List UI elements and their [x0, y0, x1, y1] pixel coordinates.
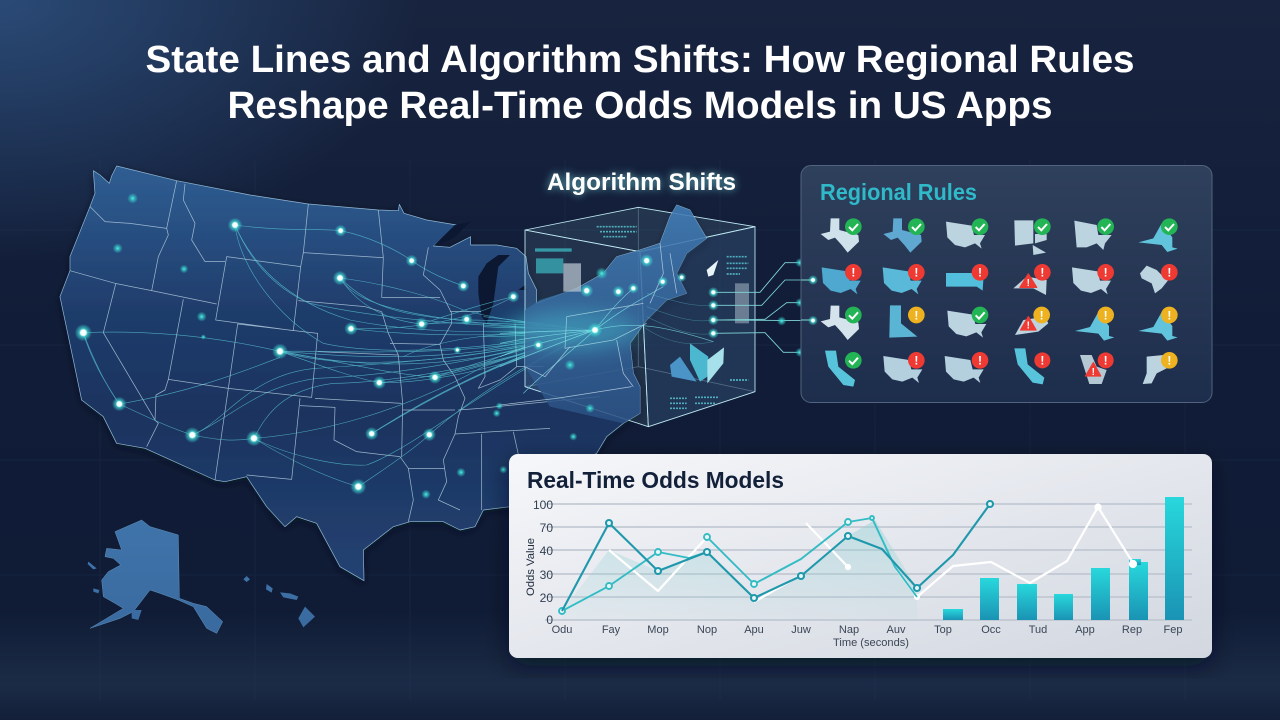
- icon: New York caution 1: [1075, 307, 1114, 341]
- icon: New York caution 2: [1138, 307, 1178, 341]
- icon: Southeast mixed alert: [1015, 307, 1050, 335]
- y axis labels: 20: [540, 591, 553, 605]
- x axis labels: Juw: [791, 624, 811, 636]
- icon: Northeast double alert: !: [1040, 266, 1044, 280]
- cube data readouts: [535, 227, 749, 408]
- icon: Southeast alert: !: [1167, 266, 1171, 280]
- icon: US region approved row three: [947, 307, 988, 338]
- icon: Nevada double alert: !: [1092, 367, 1095, 378]
- y axis labels: 30: [540, 568, 553, 582]
- connector nodes: [801, 275, 818, 326]
- y axis labels: 40: [540, 544, 553, 558]
- connector lines: [708, 258, 813, 357]
- icon: California alert: !: [1040, 354, 1044, 368]
- icon: Texas approved blue: [883, 218, 925, 253]
- Northeast map inside cube: [500, 205, 713, 423]
- icon: Northeast double alert: !: [1027, 278, 1030, 289]
- title: State Lines and Algorithm Shifts: How Regional Rules: [146, 39, 1134, 81]
- panel: Real-Time Odds Models: [509, 454, 1212, 658]
- y axis labels: 70: [540, 521, 553, 535]
- y axis labels: 100: [533, 498, 553, 512]
- x axis labels: Occ: [981, 624, 1001, 636]
- cube logo: [670, 343, 724, 383]
- Great Lakes: [433, 222, 526, 323]
- icon: Southeast mixed alert: !: [1040, 308, 1044, 322]
- panel: Regional Rules: [801, 166, 1212, 402]
- icon: Northeast double alert: [1013, 264, 1051, 295]
- Alaska: [90, 520, 223, 633]
- icon: Kansas alert: !: [978, 266, 982, 280]
- icon: US region alert 1: !: [851, 266, 855, 280]
- y axis labels: [533, 498, 553, 627]
- bar series: [943, 497, 1184, 620]
- icon: Nevada double alert: !: [1104, 354, 1108, 368]
- heading: Real-Time Odds Models: Real-Time Odds Models: [527, 467, 784, 493]
- icon: US region alert row four 1: [883, 352, 925, 383]
- area under lines: [562, 520, 917, 620]
- chart gridlines: [545, 504, 1192, 620]
- white line series: [562, 504, 1136, 611]
- icon: South alert: !: [1104, 266, 1108, 280]
- icon: Midwest approved: [1014, 218, 1051, 255]
- icon: Idaho caution: !: [914, 308, 918, 322]
- x axis labels: Nap: [839, 624, 859, 636]
- icon: US region alert 1: [822, 264, 862, 294]
- title: Reshape Real-Time Odds Models in US Apps: [228, 85, 1052, 127]
- y axis labels: 0: [546, 613, 553, 627]
- icon: Southeast caution: [1143, 352, 1178, 384]
- x axis labels: Top: [934, 624, 952, 636]
- state nodes inside cube: [533, 254, 686, 441]
- x axis labels: Nop: [697, 624, 717, 636]
- icon: US region alert 2: [883, 264, 925, 294]
- state nodes: [75, 193, 519, 499]
- icon: Southeast caution: !: [1167, 354, 1171, 368]
- dark teal line series: [562, 501, 993, 611]
- icon: Idaho caution: [889, 305, 925, 338]
- icon: Texas approved: [821, 218, 862, 253]
- icon: central US approved: [1074, 218, 1114, 250]
- heading: Regional Rules: Regional Rules: [820, 179, 977, 205]
- x axis labels: [552, 624, 1182, 636]
- heading: Algorithm Shifts: Algorithm Shifts: [547, 169, 736, 196]
- Hawaii: [88, 562, 315, 627]
- x axis labels: Apu: [744, 624, 764, 636]
- icon: Kansas alert: [946, 264, 988, 291]
- x axis labels: Rep: [1122, 624, 1142, 636]
- light teal line series: [559, 516, 917, 614]
- icon: US region approved: [946, 218, 988, 249]
- icon: New York caution 2: !: [1167, 308, 1171, 322]
- icon: South alert: [1072, 264, 1114, 294]
- contiguous states: [60, 166, 707, 581]
- x axis labels: Tud: [1029, 624, 1047, 636]
- icon: US region alert row four 1: !: [914, 354, 918, 368]
- icon: Nevada double alert: [1080, 352, 1114, 384]
- icon: California approved: [825, 351, 862, 387]
- algorithm cube: [500, 205, 813, 441]
- map: United States: [60, 166, 707, 633]
- flow haze: [493, 315, 607, 358]
- state borders: [70, 181, 600, 522]
- icon: Texas approved row three: [821, 306, 862, 340]
- icon: US region alert 2: !: [914, 266, 918, 280]
- heading: Algorithm Shifts: Algorithm Shifts: [547, 169, 736, 196]
- x axis labels: Fep: [1164, 624, 1182, 636]
- icon: New York caution 1: !: [1104, 308, 1108, 322]
- title: [146, 39, 1134, 127]
- icon: Southeast alert: [1140, 264, 1178, 293]
- icon: US region alert row four 2: [945, 352, 988, 383]
- x axis title: Time (seconds): [833, 637, 909, 649]
- x axis labels: Odu: [552, 624, 572, 636]
- icon: US region alert row four 2: !: [978, 354, 982, 368]
- x axis labels: Auv: [887, 624, 906, 636]
- y axis title: Odds Value: [525, 538, 537, 596]
- icon: Southeast mixed alert: !: [1027, 321, 1030, 332]
- status icon grid: [821, 218, 1178, 387]
- icon: New York approved: [1138, 218, 1178, 252]
- cube faces: [525, 207, 755, 427]
- flow lines: [83, 225, 595, 487]
- x axis labels: App: [1075, 624, 1095, 636]
- icon: California alert: [1014, 348, 1050, 384]
- x axis labels: Mop: [647, 624, 669, 636]
- x axis labels: Fay: [602, 624, 621, 636]
